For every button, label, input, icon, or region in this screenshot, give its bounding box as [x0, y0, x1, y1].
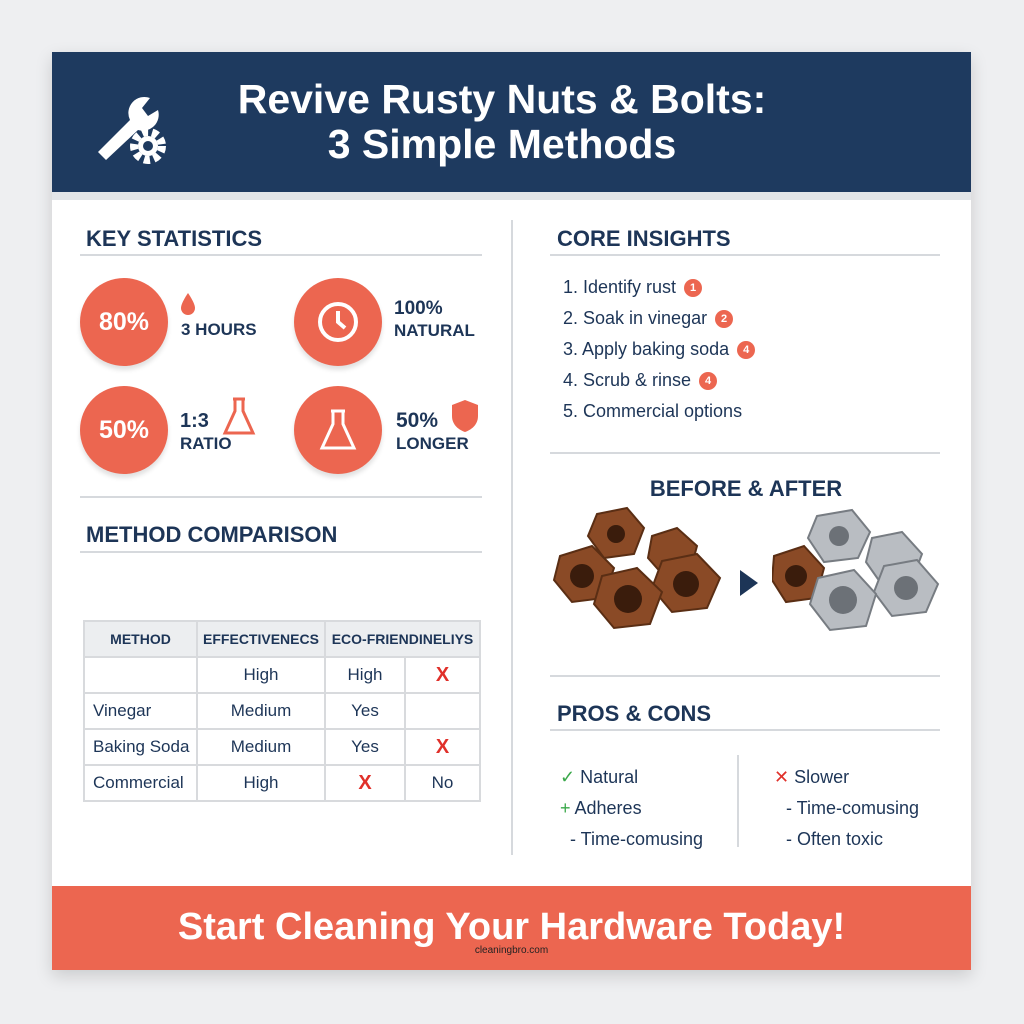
panel: pros and cons: - Time-comusing: [570, 829, 703, 849]
arrow: [740, 570, 758, 596]
header banner: [52, 52, 971, 192]
title: 3 Simple Methods: [328, 121, 676, 167]
comparison table: Medium: [231, 701, 291, 720]
insight list: 5. Commercial options: [563, 401, 742, 421]
stat 50% longer: [294, 386, 382, 474]
comparison table: Commercial: [93, 773, 184, 792]
panel: pros and cons: + Adheres: [560, 798, 642, 818]
comparison table: Medium: [231, 737, 291, 756]
comparison table: High: [348, 665, 382, 684]
panel: key statistics: [79, 226, 482, 479]
panel: pros and cons: - Time-comusing: [786, 798, 919, 818]
stat 50% ratio: 50%: [99, 416, 149, 444]
stat 80%: [80, 278, 168, 366]
stat 80%: 80%: [99, 308, 149, 336]
heading: CORE INSIGHTS: [557, 226, 731, 251]
comparison table: [83, 620, 481, 802]
icon: wrench and gear: [98, 97, 166, 164]
stat 50% ratio: [80, 386, 168, 474]
insight list: 4: [743, 344, 749, 356]
comparison table: X: [358, 772, 372, 794]
panel: key statistics: NATURAL: [394, 321, 475, 340]
insight list: 2: [721, 313, 727, 325]
panel: pros and cons: - Often toxic: [786, 829, 883, 849]
heading: BEFORE & AFTER: [650, 476, 842, 501]
comparison table: High: [244, 665, 278, 684]
comparison table: METHOD: [110, 631, 171, 647]
insight list: 3. Apply baking soda: [563, 339, 729, 359]
stat 100%: [294, 278, 382, 366]
insight list: 4: [705, 375, 711, 387]
comparison table: Yes: [351, 701, 379, 720]
image: rusty nuts: [552, 506, 722, 629]
comparison table: Vinegar: [93, 701, 151, 720]
panel: key statistics: LONGER: [396, 434, 469, 453]
image: clean nuts: [772, 508, 940, 631]
source: cleaningbro.com: [475, 945, 548, 956]
heading: PROS & CONS: [557, 701, 711, 726]
pros list: ✓ Natural: [560, 767, 638, 787]
comparison table: Baking Soda: [93, 737, 189, 756]
footer banner: [52, 886, 971, 970]
call to action: Start Cleaning Your Hardware Today!: [178, 906, 845, 948]
comparison table: EFFECTIVENECS: [203, 631, 319, 647]
comparison table: ECO-FRIENDINELIYS: [332, 631, 473, 647]
insight list: 1. Identify rust: [563, 277, 676, 297]
heading: METHOD COMPARISON: [86, 522, 337, 547]
panel: method comparison: [80, 522, 482, 802]
panel: key statistics: RATIO: [180, 434, 232, 453]
panel: pros and cons: [550, 701, 940, 849]
comparison table: No: [432, 773, 453, 792]
insight list: [563, 277, 755, 421]
comparison table: Yes: [351, 737, 379, 756]
panel: before and after: [552, 476, 940, 631]
insight list: 1: [690, 282, 696, 294]
heading: KEY STATISTICS: [86, 226, 262, 251]
panel: key statistics: 3 HOURS: [181, 320, 257, 339]
comparison table: X: [436, 736, 449, 758]
insight list: 2. Soak in vinegar: [563, 308, 707, 328]
title: Revive Rusty Nuts & Bolts:: [238, 76, 766, 122]
cons list: ✕ Slower: [774, 767, 849, 787]
comparison table: X: [436, 664, 449, 686]
panel: key statistics: 100%: [394, 298, 443, 319]
panel: key statistics: 50%: [396, 409, 438, 432]
insight list: 4. Scrub & rinse: [563, 370, 691, 390]
title: [238, 76, 766, 167]
divider: [511, 220, 513, 855]
comparison table: High: [244, 773, 278, 792]
panel: key statistics: 1:3: [180, 410, 209, 432]
